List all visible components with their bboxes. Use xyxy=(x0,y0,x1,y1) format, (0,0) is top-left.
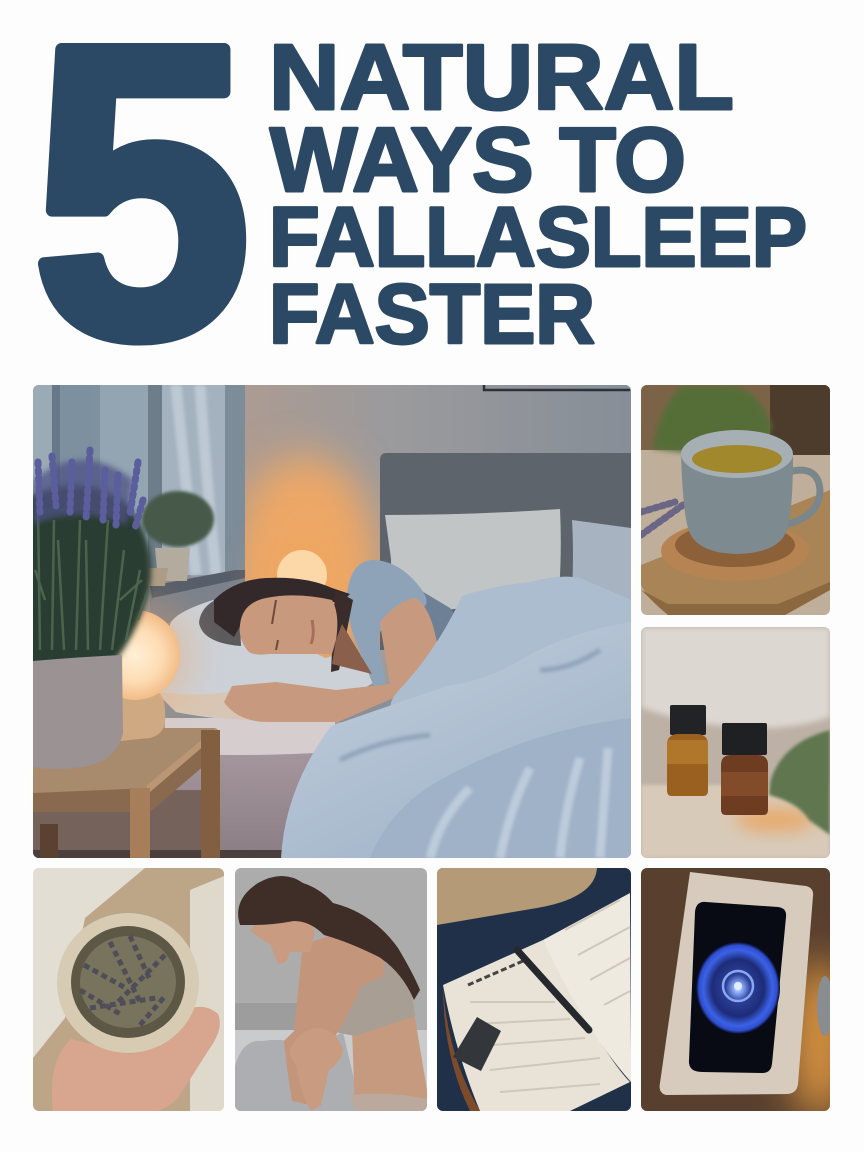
window sill xyxy=(150,578,245,623)
hair xyxy=(214,578,350,637)
wooden board xyxy=(641,490,830,615)
panel: phone with blue light xyxy=(641,868,850,1120)
face xyxy=(240,595,337,655)
hair xyxy=(238,876,420,1000)
pillow under head xyxy=(156,600,380,720)
hand xyxy=(52,1007,220,1111)
face xyxy=(250,909,315,964)
mug xyxy=(681,430,820,554)
top xyxy=(338,961,415,1036)
potted plant on sill xyxy=(138,491,214,586)
coaster xyxy=(661,528,809,581)
underwear xyxy=(350,1094,427,1111)
window and curtain xyxy=(33,385,245,585)
duvet xyxy=(281,577,631,858)
title xyxy=(32,0,807,423)
eraser xyxy=(453,1017,501,1071)
panel: essential oils xyxy=(641,627,830,858)
title text: natural ways to fall asleep faster: FALLASLEEP xyxy=(269,190,807,284)
title text: natural ways to fall asleep faster: FASTER xyxy=(269,267,595,361)
forearm and hand xyxy=(290,1028,343,1111)
bedside table xyxy=(33,728,220,858)
lavender plant in pot xyxy=(25,450,151,769)
headboard xyxy=(380,453,631,650)
pillows xyxy=(384,509,631,619)
panel: herbal tea xyxy=(641,385,830,615)
woman xyxy=(199,560,477,722)
glowing table lamp xyxy=(88,603,192,741)
open notebook xyxy=(443,893,631,1111)
waist xyxy=(352,1012,427,1111)
title text: natural ways to fall asleep faster xyxy=(269,25,807,361)
leaves background xyxy=(652,386,772,453)
bottle right xyxy=(721,723,768,815)
herb sprig xyxy=(769,730,830,835)
phone xyxy=(689,902,786,1073)
charging pad xyxy=(660,872,813,1095)
framed picture edge xyxy=(484,385,630,390)
title text: natural ways to fall asleep faster: NATURAL xyxy=(269,25,734,129)
panel: woman sleeping in bedroom xyxy=(25,385,631,858)
panel: journal and pen xyxy=(437,868,631,1111)
mattress xyxy=(33,718,342,858)
walls xyxy=(33,385,631,858)
neck and arm xyxy=(284,928,385,1105)
woman body xyxy=(238,876,427,1111)
panel: dried herbs in bowl xyxy=(33,868,224,1111)
pen xyxy=(517,950,589,1030)
lavender sprigs xyxy=(641,502,683,535)
panel: woman stretching xyxy=(235,868,427,1111)
hair bun xyxy=(199,598,241,646)
bowl xyxy=(57,913,199,1053)
blanket xyxy=(235,1032,357,1111)
title text: natural ways to fall asleep faster: WAYS TO xyxy=(270,110,686,211)
arm xyxy=(224,598,448,722)
bottle left xyxy=(667,705,708,796)
lamp glow on wall xyxy=(242,550,327,585)
torso and sleeve xyxy=(423,592,454,642)
